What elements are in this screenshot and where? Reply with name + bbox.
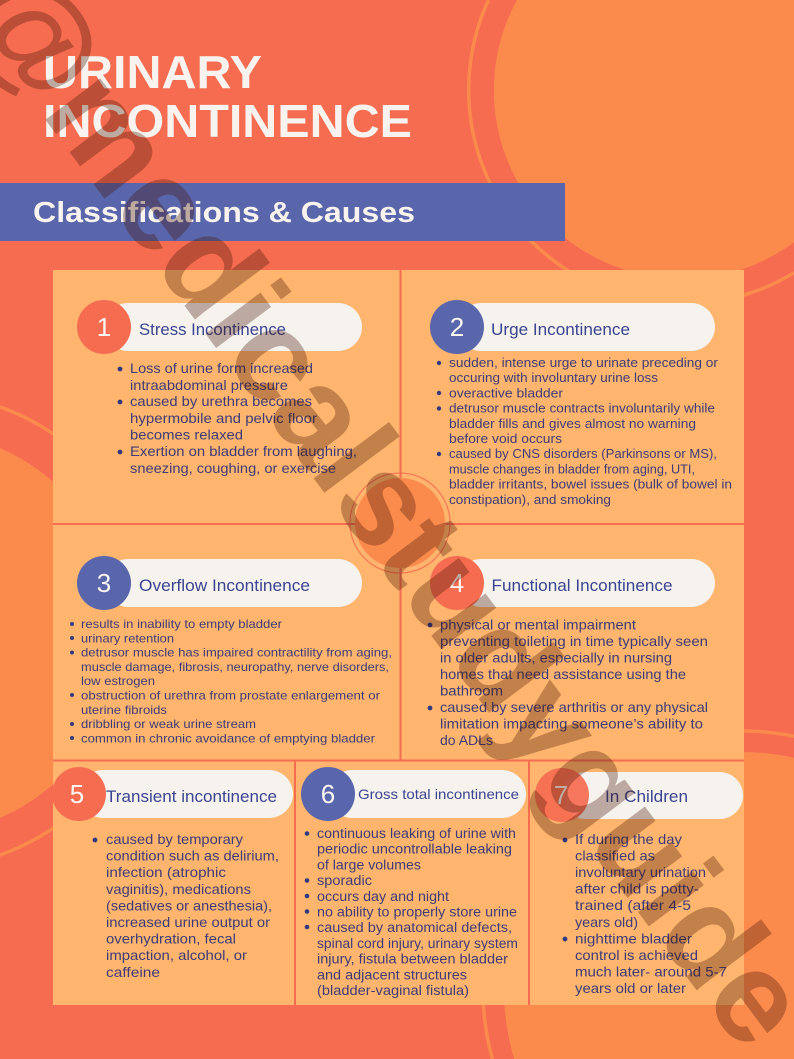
panel: transient incontinence: increased urine output or [106, 914, 270, 930]
centre circle ornament [350, 473, 450, 573]
panel: overflow incontinence: detrusor muscle has impaired contractility from aging, [81, 646, 392, 660]
panel: stress incontinence: sneezing, coughing, or exercise [130, 460, 336, 476]
title: URINARY [43, 46, 262, 98]
panel: urge incontinence: 2 [450, 312, 464, 342]
panel: transient incontinence: caused by temporary [106, 831, 243, 847]
panel: stress incontinence: caused by urethra becomes [130, 393, 312, 409]
panel: urge incontinence: bladder irritants, bowel issues (bulk of bowel in [449, 476, 732, 492]
subtitle banner [0, 183, 565, 241]
panel: gross total incontinence: periodic uncontrollable leaking [317, 842, 512, 857]
title [43, 46, 412, 147]
subtitle banner: Classifications & Causes [33, 197, 415, 229]
panel: overflow incontinence: urinary retention [81, 631, 174, 645]
panel: functional incontinence: Functional Incontinence [492, 576, 672, 595]
panel: urge incontinence [430, 300, 732, 507]
panel: in children: trained (after 4-5 [575, 897, 691, 913]
panel: transient incontinence: vaginitis), medications [106, 881, 251, 897]
panel: overflow incontinence: uterine fibroids [81, 703, 167, 717]
panel: urge incontinence: bladder fills and gives almost no warning [449, 416, 696, 431]
panel: overflow incontinence: low estrogen [81, 674, 155, 688]
panel: stress incontinence [77, 300, 362, 476]
panel: transient incontinence: impaction, alcohol, or [106, 947, 247, 963]
panel: transient incontinence: Transient incontinence [106, 787, 277, 806]
panel: stress incontinence: 1 [97, 312, 111, 342]
panel: in children: nighttime bladder [575, 930, 692, 946]
panel: overflow incontinence: results in inability to empty bladder [81, 617, 282, 631]
panel: overflow incontinence: dribbling or weak urine stream [81, 717, 256, 731]
decorative circle: left [0, 407, 158, 855]
panel: transient incontinence: (sedatives or anesthesia), [106, 897, 272, 913]
panel: urge incontinence: overactive bladder [449, 386, 564, 400]
panel: functional incontinence: homes that need assistance using the [440, 666, 686, 682]
panel: stress incontinence: Stress Incontinence [139, 320, 286, 339]
panel: in children: In Children [605, 787, 688, 806]
panel: transient incontinence: 5 [70, 779, 84, 809]
panel: gross total incontinence: Gross total incontinence [358, 786, 519, 802]
panel: in children: involuntary urination [575, 864, 706, 880]
panel: functional incontinence: in older adults, especially in nursing [440, 650, 672, 666]
card grid background [53, 270, 744, 1005]
panel: gross total incontinence: spinal cord injury, urinary system [317, 936, 518, 951]
panel: functional incontinence: physical or mental impairment [440, 616, 636, 632]
panel: overflow incontinence [70, 556, 392, 745]
title: INCONTINENCE [43, 95, 412, 147]
panel: transient incontinence: condition such as delirium, [106, 848, 279, 864]
panel: gross total incontinence: of large volumes [317, 857, 421, 872]
panel: urge incontinence: detrusor muscle contracts involuntarily while [449, 400, 715, 416]
panel: stress incontinence: becomes relaxed [130, 426, 243, 442]
panel: gross total incontinence: no ability to properly store urine [317, 904, 517, 920]
panel: overflow incontinence: muscle damage, fibrosis, neuropathy, nerve disorders, [81, 660, 389, 674]
panel: functional incontinence: do ADLs [440, 732, 493, 748]
panel: functional incontinence: limitation impacting someone’s ability to [440, 716, 703, 732]
panel: in children: much later- around 5-7 [575, 964, 727, 980]
panel: overflow incontinence: Overflow Incontinence [139, 576, 310, 595]
panel: gross total incontinence [301, 767, 526, 998]
panel: urge incontinence: caused by CNS disorders (Parkinsons or MS), [449, 446, 717, 461]
panel: urge incontinence: muscle changes in bladder from aging, UTI, [449, 462, 695, 476]
panel: gross total incontinence: 6 [321, 779, 335, 809]
panel: gross total incontinence: caused by anatomical defects, [317, 920, 512, 935]
panel: functional incontinence [428, 556, 715, 748]
panel: urge incontinence: before void occurs [449, 431, 563, 446]
panel: in children: If during the day [575, 831, 682, 847]
panel: functional incontinence: bathroom [440, 682, 503, 698]
panel: in children: years old) [575, 914, 638, 930]
panel: functional incontinence: caused by severe arthritis or any physical [440, 699, 708, 715]
panel: in children: classified as [575, 848, 655, 864]
panel: stress incontinence: Loss of urine form increased [130, 360, 313, 376]
panel: stress incontinence: hypermobile and pelvic floor [130, 410, 317, 426]
panel: in children: 7 [554, 780, 568, 810]
panel: gross total incontinence: (bladder-vaginal fistula) [317, 983, 469, 998]
panel: in children: years old or later [575, 980, 686, 996]
panel: in children: after child is potty- [575, 881, 699, 897]
panel: transient incontinence [52, 767, 293, 980]
decorative circle: top right [469, 0, 794, 304]
panel: overflow incontinence: 3 [97, 568, 111, 598]
panel: stress incontinence: intraabdominal pressure [130, 377, 288, 393]
panel: gross total incontinence: sporadic [317, 873, 372, 888]
panel: transient incontinence: caffeine [106, 964, 160, 980]
panel: overflow incontinence: obstruction of urethra from prostate enlargement or [81, 688, 380, 702]
panel: in children: control is achieved [575, 947, 698, 963]
panel: urge incontinence: occuring with involuntary urine loss [449, 370, 659, 385]
panel: urge incontinence: sudden, intense urge to urinate preceding or [449, 355, 719, 370]
panel: in children [535, 768, 743, 996]
panel: stress incontinence: Exertion on bladder from laughing, [130, 443, 357, 459]
panel: functional incontinence: 4 [450, 568, 464, 598]
panel: gross total incontinence: occurs day and night [317, 889, 449, 904]
panel: functional incontinence: preventing toileting in time typically seen [440, 633, 708, 649]
panel: gross total incontinence: continuous leaking of urine with [317, 826, 516, 841]
panel: overflow incontinence: common in chronic avoidance of emptying bladder [81, 731, 375, 745]
panel: transient incontinence: infection (atrophic [106, 864, 226, 880]
panel: gross total incontinence: injury, fistula between bladder [317, 952, 509, 967]
panel: urge incontinence: constipation), and smoking [449, 492, 611, 507]
panel: gross total incontinence: and adjacent structures [317, 967, 467, 982]
panel: transient incontinence: overhydration, fecal [106, 931, 236, 947]
decorative circle: bottom right [483, 731, 794, 1059]
panel: urge incontinence: Urge Incontinence [491, 320, 630, 339]
